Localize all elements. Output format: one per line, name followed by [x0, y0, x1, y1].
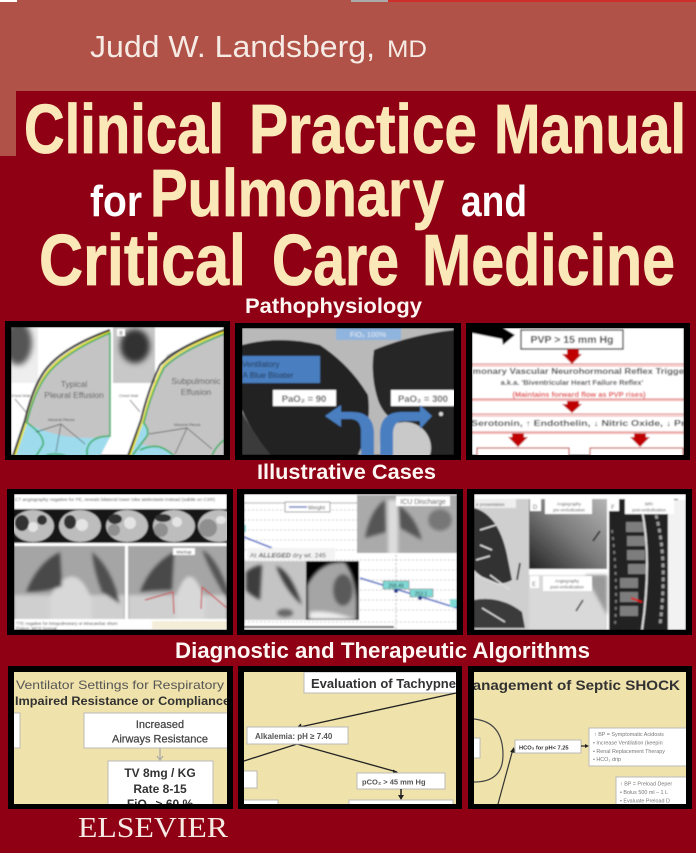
title: Clinical — [24, 90, 224, 168]
panel: ventilator settings algorithm: Rate 8-15 — [133, 782, 187, 796]
panel: neurohormonal reflex flowchart: a.k.a. 'Biventricular Heart Failure Reflex' — [501, 378, 644, 387]
panel: angiography and MRI case: Angiography — [555, 578, 580, 584]
panel: pleural effusion diagrams: Subpulmonic — [171, 376, 221, 386]
title: Critical — [39, 221, 246, 301]
panel: angiography and MRI case: post-embolization — [550, 584, 584, 590]
salmon header band — [0, 2, 696, 156]
panel: angiography and MRI case: post-embolization — [632, 508, 666, 512]
panel: ventilator settings algorithm: Increased — [136, 719, 184, 731]
panel: neurohormonal reflex flowchart: imonary Vascular Neurohormonal Reflex Trigge — [470, 366, 684, 376]
panel: evaluation of tachypnea algorithm: Alkalemia: pH ≥ 7.40 — [255, 732, 333, 741]
panel: neurohormonal reflex flowchart: Serotonin, ↑ Endothelin, ↓ Nitric Oxide, ↓ Pr — [471, 419, 685, 428]
author: MD — [387, 36, 427, 63]
panel: pleural effusion diagrams: Chest Wall — [119, 393, 138, 398]
panel: evaluation of tachypnea algorithm: pCO₂ > 45 mm Hg — [362, 778, 426, 786]
panel: ventilation CT: PaO₂ = 300 — [398, 394, 448, 405]
title: Care — [272, 221, 399, 301]
panel: neurohormonal reflex flowchart: (Maintains forward flow as PVP rises) — [512, 390, 646, 399]
title: for — [90, 177, 142, 226]
panel: angiography and MRI case — [467, 489, 692, 635]
title: and — [461, 177, 527, 226]
panel: weight chart with x-rays — [237, 489, 463, 635]
panel: CT and chest x-ray case: TTE negative for intrapulmonary or intracardiac shunt — [16, 621, 118, 626]
panel: weight chart with x-rays: 253.1 — [415, 592, 427, 598]
heading: Diagnostic and Therapeutic Algorithms: Diagnostic and Therapeutic Algorithms — [175, 638, 590, 663]
panel: pleural effusion diagrams: Pleural Effusion — [44, 390, 104, 400]
panel: ventilation CT: A Blue Bloater — [242, 371, 294, 380]
panel: ventilator settings algorithm: TV 8mg / KG — [124, 766, 196, 780]
title: Pulmonary — [150, 156, 444, 231]
panel: ventilator settings algorithm: Airways Resistance — [112, 734, 208, 746]
panel: weight chart with x-rays: ICU Discharge — [400, 499, 446, 506]
title — [24, 90, 686, 301]
panel: management of septic shock algorithm: • Renal Replacement Therapy — [593, 749, 665, 755]
publisher logo: ELSEVIER — [78, 813, 228, 844]
panel: neurohormonal reflex flowchart: PVP > 15 mm Hg — [531, 334, 613, 346]
panel: angiography and MRI case: Angiography — [557, 502, 582, 506]
panel: management of septic shock algorithm: • HCO₃ drip — [593, 757, 621, 763]
panel: pleural effusion diagrams: Visceral Pleura — [48, 417, 75, 422]
panel: pleural effusion diagrams: B — [119, 331, 123, 337]
panel: neurohormonal reflex flowchart — [466, 323, 690, 468]
panel: evaluation of tachypnea algorithm: Evaluation of Tachypnea — [311, 676, 464, 691]
panel: management of septic shock algorithm: Management of Septic SHOCK — [460, 677, 680, 693]
panel: CT and chest x-ray case: Markup — [176, 550, 192, 554]
heading: Illustrative Cases: Illustrative Cases — [257, 461, 436, 484]
top edge strip — [0, 0, 696, 3]
panel: ventilation CT: PaO₂ = 90 — [282, 394, 326, 405]
panel: CT and chest x-ray case: CT angiography negative for PE, reveals bilateral lower lobe atelectasis instead (subtle on CXR) — [15, 497, 216, 502]
panel: angiography and MRI case: E — [532, 582, 536, 588]
panel: ventilator settings algorithm: Impaired Resistance or Compliance — [15, 694, 230, 708]
panel: management of septic shock algorithm — [460, 666, 692, 809]
panel: management of septic shock algorithm: ↑ BP = Symptomatic Acidosis — [594, 732, 664, 738]
panel: CT and chest x-ray case: Elation: WCS Normal — [16, 626, 57, 631]
panel: management of septic shock algorithm: • Increase Ventilation (keepin — [593, 740, 663, 746]
panel: management of septic shock algorithm: HCO₃ for pH< 7.25 — [519, 746, 569, 752]
panel: ventilator settings algorithm — [8, 666, 234, 811]
panel: angiography and MRI case: pre-embolization — [553, 508, 585, 512]
panel: angiography and MRI case: F — [611, 505, 615, 511]
panel: ventilation CT: Ventilatory — [242, 360, 279, 369]
panel: weight chart with x-rays: At ALLEGED dry wt. 245 — [250, 552, 326, 560]
panel: pleural effusion diagrams: Chest Wall — [11, 393, 30, 398]
panel: CT and chest x-ray case — [7, 489, 240, 635]
panel: pleural effusion diagrams: Typical — [61, 379, 87, 389]
panel: management of septic shock algorithm: • Bolus 500 ml – 1 L — [620, 790, 668, 796]
panel: angiography and MRI case: e presentation — [476, 502, 505, 507]
panel: weight chart with x-rays: Weight — [308, 506, 325, 512]
panel: pleural effusion diagrams: Effusion — [181, 387, 212, 397]
panel: management of septic shock algorithm: • Evaluate Preload D — [620, 798, 670, 804]
panel: angiography and MRI case: MRI — [645, 502, 653, 506]
heading: Pathophysiology: Pathophysiology — [245, 295, 422, 318]
panel: ventilator settings algorithm: Ventilator Settings for Respiratory — [16, 678, 224, 692]
panel: ventilation CT — [235, 323, 461, 474]
panel: evaluation of tachypnea algorithm — [238, 666, 464, 810]
panel: weight chart with x-rays: 258.49 — [388, 584, 404, 590]
author: Judd W. Landsberg, — [90, 29, 375, 64]
title: Practice — [249, 90, 477, 168]
panel: management of septic shock algorithm: ↑ BP = Preload Deper — [620, 782, 672, 788]
panel: ventilator settings algorithm: FiO₂ > 60 % — [127, 797, 194, 811]
panel: angiography and MRI case: D — [533, 505, 538, 511]
panel: ventilation CT: FiO₂ 100% — [350, 330, 386, 339]
panel: pleural effusion diagrams: Visceral Pleura — [174, 422, 201, 427]
panel: pleural effusion diagrams — [4, 321, 230, 460]
